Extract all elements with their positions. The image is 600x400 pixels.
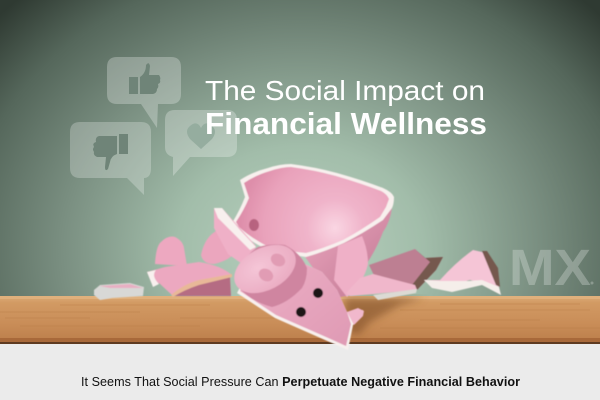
ear tip: [347, 308, 364, 325]
tagline: It Seems That Social Pressure Can Perpetuate Negative Financial Behavior: [81, 375, 520, 389]
left shard: [94, 283, 144, 300]
right shards: [369, 249, 443, 290]
logo: MX: MX: [509, 239, 591, 296]
shelf shadow under pig: [345, 298, 425, 335]
broken piggy bank: [94, 164, 501, 350]
icon: heart speech bubble: [165, 110, 237, 176]
background wall: [0, 0, 600, 297]
interior dent: [249, 219, 259, 231]
rear leg: [201, 230, 240, 264]
bowl interior: [232, 164, 394, 257]
icon: thumbs up speech bubble: [107, 57, 181, 128]
ear and fragment: [155, 237, 187, 266]
footer band: [0, 344, 600, 400]
bowl outer shell: [300, 208, 392, 298]
icon: thumbs down speech bubble: [70, 122, 151, 195]
eyes: [313, 288, 323, 298]
title: The Social Impact on: [205, 75, 485, 106]
snout: [236, 244, 307, 307]
title: [205, 75, 487, 141]
pig face: [237, 250, 363, 350]
title: Financial Wellness: [205, 106, 487, 141]
wooden shelf: [0, 296, 600, 344]
lower body column: [334, 236, 368, 297]
inner broken side: [214, 208, 256, 268]
